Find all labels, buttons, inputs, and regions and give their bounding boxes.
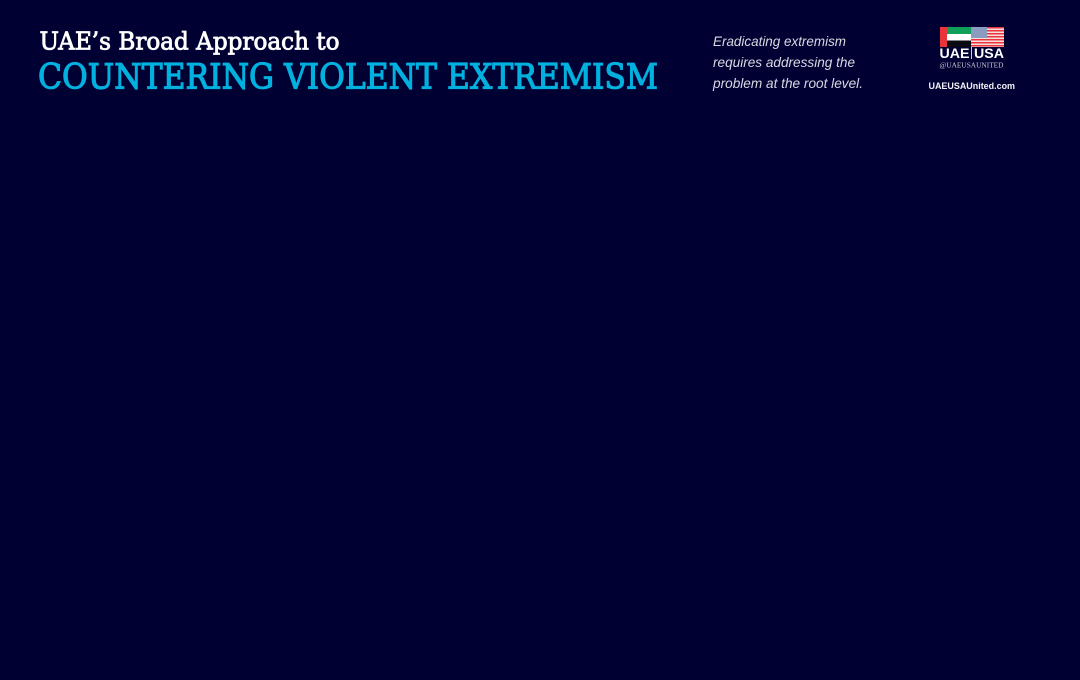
tagline text block: Eradicating extremism <box>713 33 846 49</box>
title line two: COUNTERING VIOLENT EXTREMISM <box>38 58 658 98</box>
logo wordmark: USA <box>974 46 1004 61</box>
tagline text block: requires addressing the <box>713 54 855 70</box>
tagline text block: problem at the root level. <box>712 75 863 91</box>
icon: USA flag <box>971 27 1004 47</box>
title <box>38 28 658 98</box>
website: UAEUSAUnited.com <box>928 81 1015 92</box>
logo: UAE USA United <box>928 27 1015 92</box>
logo wordmark: UAE <box>940 46 970 61</box>
icon: UAE flag <box>940 27 971 47</box>
title line one: UAE’s Broad Approach to <box>40 28 340 56</box>
tagline text block <box>712 33 863 91</box>
logo handle: @UAEUSAUNITED <box>940 62 1004 70</box>
logo wordmark <box>940 46 1004 61</box>
